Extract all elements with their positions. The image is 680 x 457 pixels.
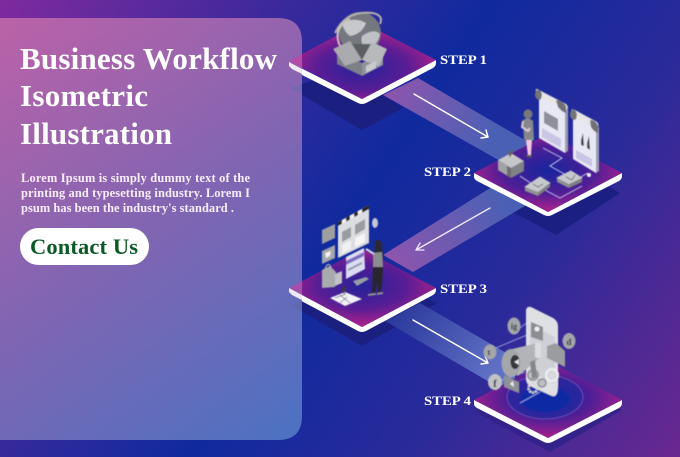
arrow: step 3 to step 4 [413,320,488,364]
connector band: step 1 to step 2 [383,78,535,172]
contact button: Contact Us [30,234,138,259]
like tile [504,375,519,393]
button tile right [557,171,582,188]
shopping bags [322,264,342,288]
platform 1 shadow [290,70,403,130]
platform 3 shadow [292,270,437,346]
phone tile [353,277,369,286]
body text: Lorem Ipsum is simply dummy text of the [21,171,250,185]
map tile with pin [330,286,362,306]
product card left [535,89,568,153]
heading [20,41,278,151]
contact button [20,228,149,265]
label: step 4: STEP 4 [424,393,472,408]
platform 4 [474,361,622,443]
heading: Isometric [20,78,148,113]
social badge: top: ig [511,322,517,331]
arrow: step 1 to step 2 [414,94,488,138]
icon: globe in open box [333,12,387,76]
left panel [0,18,302,440]
heading: Business Workflow [20,41,278,76]
phone [526,307,558,396]
platform 4 shadow [475,372,622,452]
connector band: step 2 to step 3 [383,172,535,272]
catalogue board [338,205,369,258]
social badge: tiktok: d [566,337,572,347]
woman figure [366,240,384,296]
envelope tile [547,343,565,367]
arrow: step 2 to step 3 [416,208,490,250]
woman figure [522,109,534,158]
workflow connector lines [520,148,588,198]
body text: psum has been the industry's standard . [21,201,234,215]
label: step 1: STEP 1 [440,52,487,67]
social badge: facebook: f [493,378,497,390]
connector band: step 3 to step 4 [385,303,515,397]
body text [21,171,250,215]
platform 1 [289,22,436,104]
product card right [570,109,599,173]
platform 1 corner seen through panel [289,54,302,94]
credit card panel [346,248,365,279]
icon: woman and product cards workflow [498,89,599,198]
gear [528,384,538,392]
small tile cart [322,245,335,264]
button tile left [525,177,550,196]
gift box with pin [498,150,524,178]
platform 3 corner seen through panel [289,281,302,312]
icon: woman browsing catalogue [322,205,384,306]
target rings [507,375,583,419]
icon: phone with megaphone and social badges [484,307,583,419]
small tile top [322,224,335,244]
status dot [587,173,591,177]
social connector lines [491,321,540,403]
label: step 2: STEP 2 [424,164,471,179]
label: step 3: STEP 3 [440,281,488,296]
platform 3 [289,249,436,332]
platform 2 shadow [490,160,620,235]
heading: Illustration [20,116,172,151]
social badge: left: t [488,348,491,357]
small round badge [372,218,378,228]
body text: printing and typesetting industry. Lorem I [21,186,250,200]
platform 2 [474,134,622,216]
megaphone [502,343,541,379]
